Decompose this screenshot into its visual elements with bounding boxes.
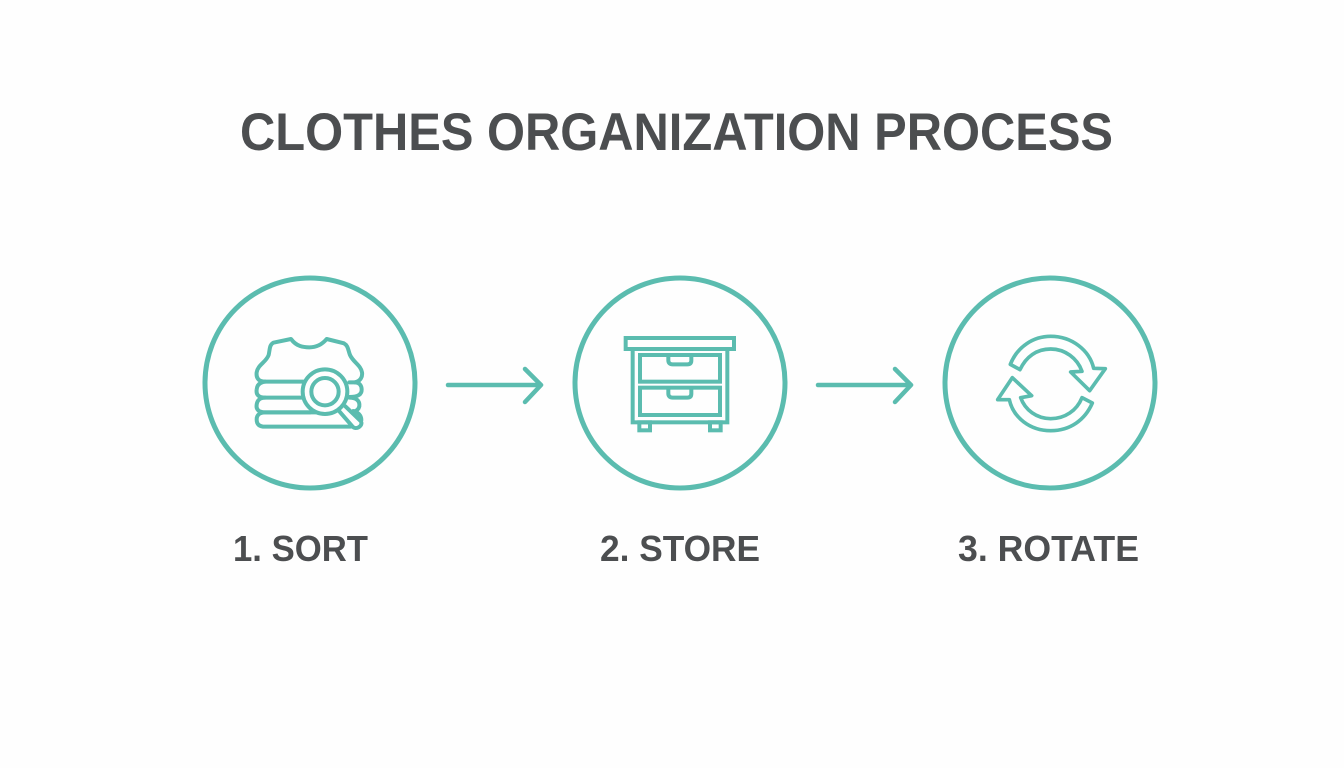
label: step 1: 1. SORT xyxy=(233,528,368,569)
circle: store xyxy=(575,278,785,488)
step 3: rotate xyxy=(945,278,1155,488)
icon: stacked shirts with magnifying glass xyxy=(257,339,362,428)
icon: rotating arrows xyxy=(998,336,1105,431)
circle: rotate xyxy=(945,278,1155,488)
step 2: store xyxy=(575,278,785,488)
circle: sort xyxy=(205,278,415,488)
label: step 2: 2. STORE xyxy=(600,528,760,569)
label: step 3: 3. ROTATE xyxy=(958,528,1139,569)
icon: two-drawer cabinet xyxy=(626,338,734,430)
arrow: sort to store xyxy=(448,369,541,402)
title: CLOTHES ORGANIZATION PROCESS xyxy=(240,103,1113,162)
arrow: store to rotate xyxy=(818,369,911,402)
step 1: sort xyxy=(205,278,415,488)
